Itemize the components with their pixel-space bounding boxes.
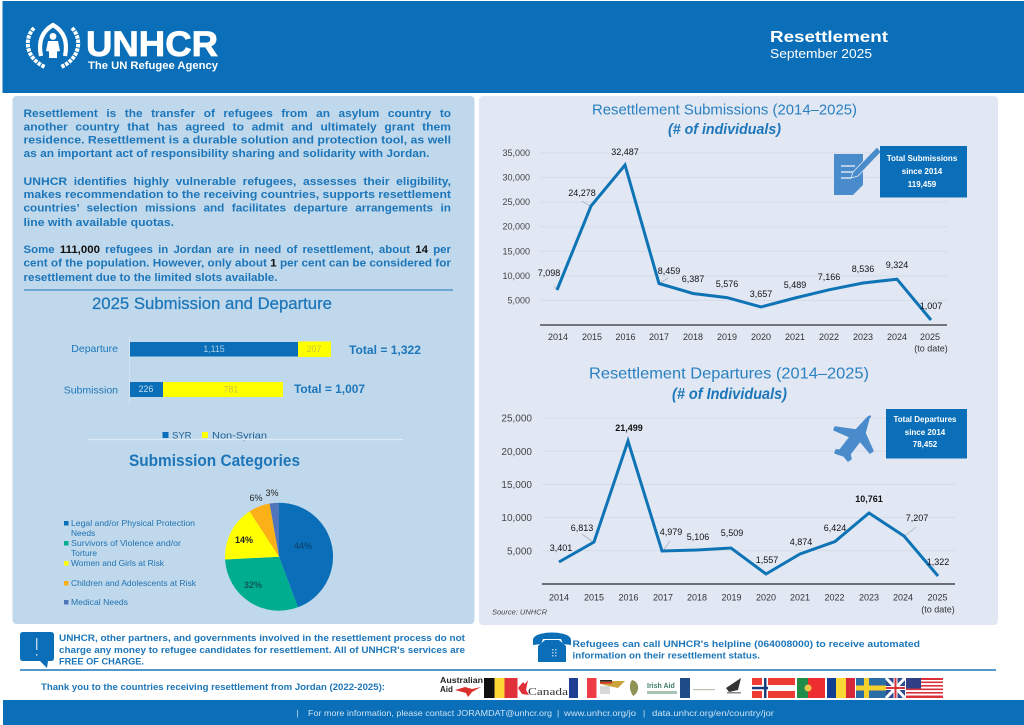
logo wordmark: The UN Refugee Agency [88,60,219,72]
pie legend: Women and Girls at Risk [71,558,165,568]
notice: free of charge: UNHCR, other partners, and governments involved in the resettlement process do not [59,633,466,644]
text block: resettlement definition [24,108,451,160]
line chart: departures: 2023 [859,592,879,602]
notice: free of charge [20,632,466,668]
line chart: submissions: 9,324 [886,260,908,270]
line chart: departures: 2015 [584,592,604,602]
text block: UNHCR role [24,176,451,229]
line chart: departures: 4,874 [790,537,812,547]
pie legend: Children and Adolescents at Risk [71,578,197,588]
flag: Portugal [797,678,825,698]
callout: total submissions: Total Submissions [887,154,958,163]
line chart: submissions: 2016 [615,332,636,342]
line chart: submissions: 2023 [853,332,873,342]
pie chart: submission categories: 6% [249,493,263,503]
pie legend: Legal and/or Physical Protection [71,518,195,528]
notice: helpline [533,632,920,662]
logo: Canada [514,678,569,698]
footer contact text [296,708,774,718]
footer contact text: | [643,708,645,718]
line chart: submissions: 7,098 [538,268,560,278]
line chart: departures: 2024 [893,592,913,602]
callout: total departures: Total Departures [894,415,957,424]
logo: Australian Aid: Australian [440,676,483,685]
heading: departures chart: Resettlement Departures (2014–2025) [589,366,869,382]
line chart: departures: 2016 [618,592,639,602]
flag: Norway [752,678,795,698]
report title: Resettlement [770,29,889,46]
line chart: departures: 2022 [824,592,845,602]
line chart: submissions [502,147,948,354]
bar chart: submission and departure [64,335,421,442]
report title: September 2025 [770,47,872,61]
pie chart: submission categories: 32% [244,580,262,590]
text block: resettlement definition: as an important act of responsibility sharing and solidarity with Jordan. [24,148,430,160]
line chart: departures: 2020 [756,592,776,602]
logo wordmark: UNHCR [86,25,218,64]
line chart: submissions: 2020 [751,332,771,342]
line chart: submissions: 2019 [717,332,737,342]
logo: Ireland [630,680,677,696]
bar chart: submission and departure: 207 [307,344,321,354]
pie legend: Torture [71,548,97,558]
text block: refugees in need: Some 111,000 refugees in Jordan are in need of resettlement, about 14 per [24,244,452,256]
bar chart: submission and departure: 1,115 [203,344,225,354]
text block: refugees in need [24,244,452,284]
line chart: submissions: 2018 [683,332,703,342]
text block: resettlement definition: residence. Resettlement is a durable solution and protection tool, as well [24,134,451,146]
footer contact text: data.unhcr.org/en/country/jor [652,708,774,718]
line chart: submissions: 20,000 [502,222,530,232]
line chart: submissions: 8,459 [658,266,680,276]
line chart: departures: 20,000 [501,447,532,458]
logo: Australian Aid [440,676,483,697]
text block: resettlement definition: Resettlement is the transfer of refugees from an asylum country to [24,108,451,120]
notice: helpline: Refugees can call UNHCR's helpline (064008000) to receive automated [572,639,920,650]
callout: total submissions [880,146,967,198]
line chart: submissions: 32,487 [611,147,639,157]
logo: Ireland: Irish Aid [647,683,675,690]
pie chart: submission categories: 14% [235,535,253,545]
line chart: departures: 2019 [721,592,742,602]
pie chart: submission categories: 44% [294,541,312,551]
line chart: submissions: 2015 [582,332,602,342]
pie chart: submission categories [225,488,333,611]
logo: Canada: Canada [528,687,569,698]
donor flags and logos [440,676,943,698]
pie legend: Survivors of Violence and/or [71,538,181,548]
line chart: departures: 10,761 [855,494,883,504]
line chart: submissions: 5,576 [716,279,738,289]
flag: United Kingdom [886,678,905,698]
text block: resettlement definition: another country that has agreed to admit and ultimately grant them [24,122,451,134]
line chart: departures: 3,401 [550,543,572,553]
flag: France [569,678,596,698]
line chart: submissions: 2014 [548,332,568,342]
heading: submissions chart: (# of individuals) [668,121,781,138]
notice: helpline: information on their resettlement status. [572,650,760,662]
line chart: departures: 6,813 [571,523,593,533]
callout: total departures [886,409,967,458]
line chart: departures: 1,557 [756,555,778,565]
pie chart: submission categories: 3% [265,488,279,498]
bar chart: submission and departure: 226 [139,384,153,394]
heading: 2025 submission and departure: 2025 Submission and Departure [92,295,332,313]
line chart: departures [501,414,955,614]
callout: total submissions: since 2014 [902,167,943,176]
line chart: submissions: 30,000 [502,172,530,182]
source note: Source: UNHCR [492,608,548,616]
line chart: submissions: 3,657 [750,289,772,299]
line chart: departures: 6,424 [824,523,846,533]
icon: UNHCR emblem [28,25,78,67]
line chart: departures: 5,509 [721,528,743,538]
flag: United States [906,678,943,698]
line chart: submissions: 1,007 [920,301,942,311]
line chart: departures: 21,499 [615,423,643,433]
pie legend [64,518,197,607]
pie legend: Needs [71,528,95,538]
chart legend: Non-Syrian [212,430,267,442]
notice: free of charge: FREE OF CHARGE. [59,656,144,668]
heading: submissions chart [592,102,857,138]
callout: total submissions: 119,459 [908,180,937,189]
bar chart: submission and departure: Departure [71,343,118,355]
panel: left column [12,96,474,624]
bar chart: submission and departure: Submission [64,384,118,396]
line chart: departures: 2018 [687,592,707,602]
chart legend: SYR [172,430,192,442]
footer band [3,700,1024,725]
heading: submission categories: Submission Categories [129,451,300,470]
footer contact text: | [296,708,299,718]
line chart: departures: 15,000 [501,480,532,491]
line chart: departures: 7,207 [906,513,928,523]
icon: airplane [834,416,873,461]
pie legend: Medical Needs [71,597,128,607]
text block: UNHCR role: UNHCR identifies highly vulnerable refugees, assesses their eligibility, [24,176,451,188]
report title [770,29,889,61]
footer contact text: | [557,708,559,718]
line chart: submissions: 5,000 [507,296,530,306]
line chart: submissions: 2017 [649,332,669,342]
line chart: submissions: 6,387 [682,274,704,284]
callout: total departures: since 2014 [905,428,946,437]
line chart: submissions: 2021 [785,332,805,342]
icon: document and pencil [834,147,881,195]
bar chart: submission and departure: Total = 1,322 [349,343,421,357]
line chart: departures: 5,000 [507,546,532,558]
line chart: departures: 1,322 [927,557,949,567]
flag: Romania [827,678,855,698]
footer contact text: www.unhcr.org/jo [563,708,636,718]
line chart: submissions: 5,489 [784,280,806,290]
line chart: departures: 25,000 [501,414,532,424]
flag: Sweden [856,678,886,698]
line chart: departures: 5,106 [687,532,709,542]
line chart: departures: 4,979 [660,527,682,537]
bar chart: submission and departure: 781 [224,384,238,394]
heading: submissions chart: Resettlement Submissions (2014–2025) [592,102,857,118]
icon: telephone [533,632,571,662]
footer contact text: For more information, please contact JORAMDAT@unhcr.org [308,708,552,718]
line chart: submissions: 24,278 [568,188,596,198]
heading: departures chart [589,366,869,403]
bar chart: submission and departure: Total = 1,007 [294,382,365,396]
heading: departures chart: (# of Individuals) [672,386,787,403]
line chart: submissions: 10,000 [502,271,530,281]
line chart: submissions: 7,166 [818,272,840,282]
line chart: submissions: 8,536 [852,264,874,274]
line chart: submissions: (to date) [914,344,948,354]
chart legend [162,430,267,442]
line chart: submissions: 2025 [920,332,940,342]
line chart: departures: 10,000 [501,513,532,524]
line chart: submissions: 2024 [887,332,907,342]
panel: right column [479,96,998,625]
text block: refugees in need: resettlement due to the limited slots available. [24,272,278,284]
line chart: departures: (to date) [921,604,955,614]
text block: UNHCR role: countries’ selection missions and facilitates departure arrangements in [24,202,451,214]
line chart: submissions: 2022 [819,332,839,342]
line chart: submissions: 35,000 [502,148,530,158]
icon: alert speech bubble [20,632,54,668]
line chart: submissions: 25,000 [502,197,530,207]
line chart: submissions: 15,000 [502,246,530,256]
logo: New Zealand [726,678,741,694]
logo: Netherlands [680,678,715,698]
header band [2,1,1024,93]
thank you line: Thank you to the countries receiving resettlement from Jordan (2022-2025): [41,682,385,693]
line chart: departures: 2021 [790,592,810,602]
text block: refugees in need: cent of the population. However, only about 1 per cent can be considered for [24,258,452,270]
line chart: departures: 2017 [653,592,673,602]
text block: UNHCR role: makes recommendation to the receiving countries, supports resettlement [24,189,451,201]
text block: UNHCR role: line with available quotas. [24,217,174,229]
flag: Belgium [484,678,514,698]
callout: total departures: 78,452 [913,440,938,449]
line chart: departures: 2025 [927,592,948,602]
logo: Germany [600,680,625,694]
logo: Australian Aid: Aid [440,685,453,694]
notice: free of charge: charge any money to refugee candidates for resettlement. All of UNHCR's services are [59,645,465,656]
line chart: departures: 2014 [549,592,569,602]
